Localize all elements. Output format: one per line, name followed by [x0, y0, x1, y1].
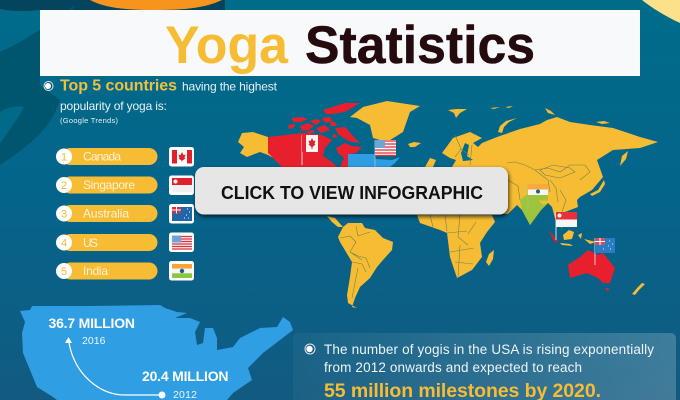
- rank 3 Australia: [56, 204, 194, 224]
- south america: [338, 223, 393, 308]
- rank 5 India: 5: [61, 266, 67, 278]
- rank 4 US: [56, 232, 194, 252]
- list: top countries: [56, 147, 194, 280]
- rank 2 Singapore: Singapore: [83, 178, 135, 192]
- heading: top 5 countries: popularity of yoga is:: [60, 99, 167, 113]
- call to action button: CLICK TO VIEW INFOGRAPHIC: [221, 183, 483, 203]
- title banner: [40, 10, 640, 76]
- rank 1 Canada: Canada: [83, 150, 121, 164]
- rank 2 Singapore: [56, 176, 194, 195]
- USA map with yogi numbers: 2016: [82, 335, 106, 347]
- USA map with yogi numbers: [20, 305, 293, 400]
- heading: top 5 countries: having the highest: [182, 80, 278, 94]
- world map: [238, 101, 658, 308]
- rank 4 US: 4: [61, 238, 67, 250]
- oceania and south east asia: [548, 230, 645, 295]
- north america: [238, 101, 421, 227]
- rank 3 Australia: Australia: [83, 206, 129, 220]
- USA map with yogi numbers: 36.7 MILLION: [48, 315, 135, 331]
- yogis growth statement: from 2012 onwards and expected to reach: [324, 360, 582, 375]
- rank 3 Australia: 3: [61, 208, 67, 220]
- heading: top 5 countries: (Google Trends): [60, 116, 118, 125]
- title banner: Statistics: [305, 16, 535, 75]
- yogis growth statement: The number of yogis in the USA is rising exponentially: [324, 342, 654, 357]
- africa: [417, 215, 495, 278]
- yogis growth statement: [305, 342, 654, 400]
- rank 1 Canada: 1: [61, 152, 67, 164]
- europe and asia: [425, 106, 658, 228]
- rank 2 Singapore: 2: [61, 180, 67, 192]
- flag: Australia: [594, 238, 615, 265]
- flag: Singapore: [556, 212, 577, 240]
- title banner: Yoga: [165, 16, 288, 75]
- panel: yogis text: [293, 333, 676, 400]
- flag: US: [374, 140, 396, 167]
- heading: top 5 countries: [44, 78, 278, 125]
- rank 4 US: US: [83, 236, 98, 250]
- rank 1 Canada: [56, 147, 194, 166]
- orange circle at top: [90, 0, 222, 10]
- rank 5 India: [56, 261, 194, 280]
- call to action button: [195, 167, 508, 214]
- heading: top 5 countries: Top 5 countries: [60, 78, 177, 94]
- rank 5 India: India: [83, 264, 108, 278]
- flag: Canada: [302, 135, 322, 165]
- USA map with yogi numbers: 20.4 MILLION: [142, 368, 228, 384]
- flag: India: [528, 184, 548, 210]
